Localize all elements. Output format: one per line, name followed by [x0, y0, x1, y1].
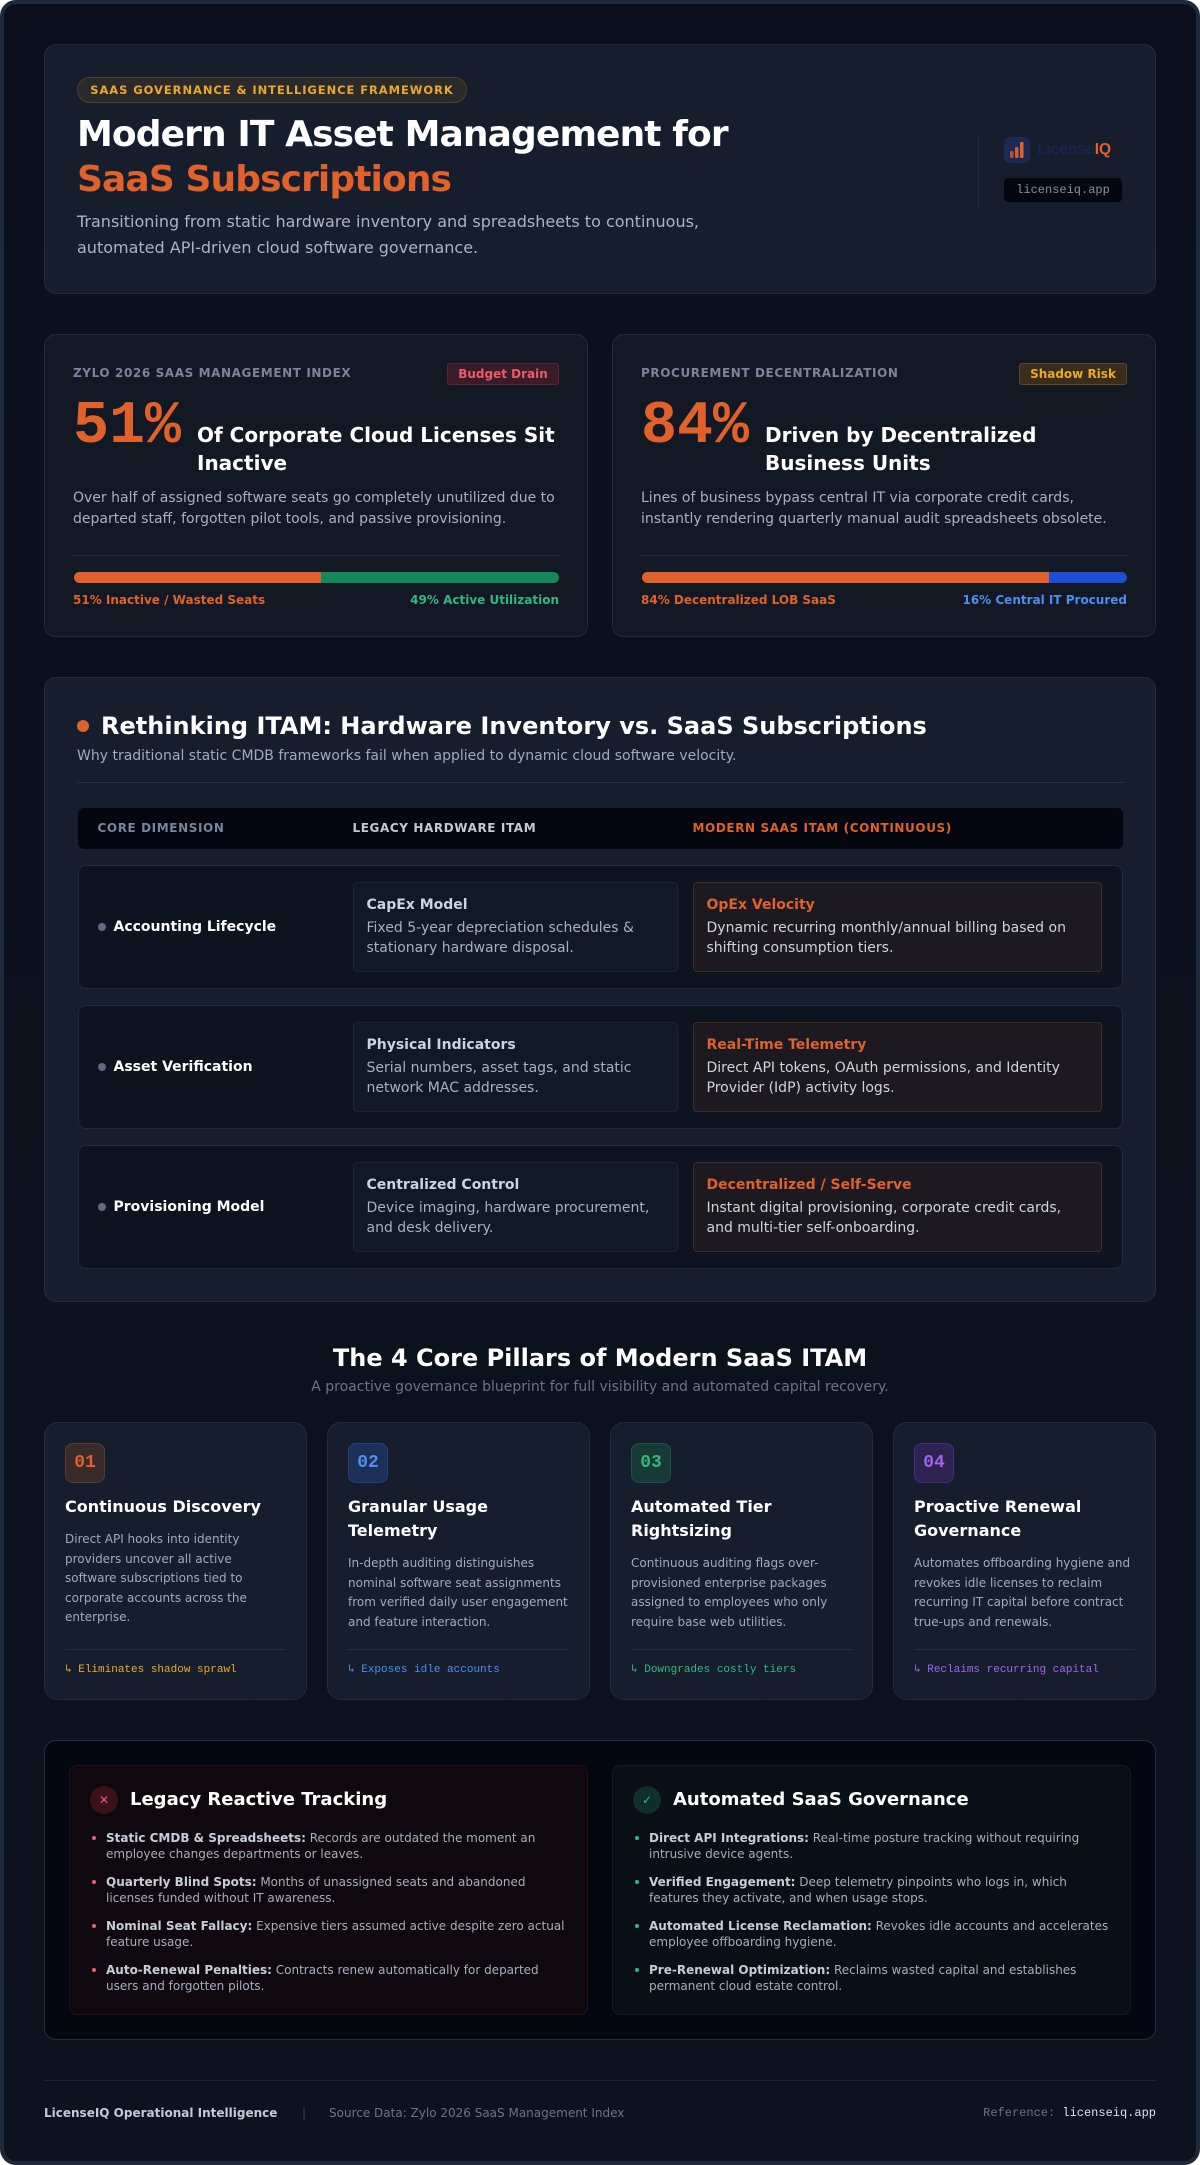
modern cell — [692, 882, 1102, 972]
pillar description: revokes idle licenses to reclaim — [914, 1576, 1102, 1590]
icon: cross: ✕ — [99, 1793, 109, 1807]
column: modern: MODERN SAAS ITAM (CONTINUOUS) — [692, 821, 952, 835]
tag: shadow risk — [1019, 363, 1127, 385]
big number: 51% — [73, 393, 181, 461]
modern cell — [692, 1162, 1102, 1252]
stat description: instantly rendering quarterly manual audit spreadsheets obsolete. — [641, 511, 1107, 527]
column: legacy: LEGACY HARDWARE ITAM — [352, 821, 536, 835]
pillar description — [631, 1556, 827, 1629]
list item — [649, 1919, 1108, 1949]
pillar title — [348, 1497, 488, 1540]
modern cell: shifting consumption tiers. — [706, 940, 893, 956]
divider — [73, 555, 560, 556]
legacy cell: CapEx Model — [366, 897, 468, 913]
table row: asset verification — [78, 1005, 1122, 1129]
stat headline — [765, 422, 1036, 474]
legacy cell: stationary hardware disposal. — [366, 940, 574, 956]
tag: shadow risk: Shadow Risk — [1030, 367, 1116, 381]
pillar card 03 — [610, 1422, 873, 1700]
pillar outcome: ↳ Downgrades costly tiers — [631, 1664, 796, 1676]
bullet — [635, 1968, 639, 1972]
list item — [649, 1963, 1076, 1993]
list item: permanent cloud estate control. — [649, 1979, 842, 1993]
bullet — [92, 1968, 96, 1972]
legacy cell: network MAC addresses. — [366, 1080, 539, 1096]
badge 01 — [65, 1443, 105, 1483]
pillar description: recurring IT capital before contract — [914, 1595, 1123, 1609]
pillar title: Granular Usage — [348, 1497, 488, 1516]
stat description — [73, 490, 555, 527]
subtitle: Transitioning from static hardware inventory and spreadsheets to continuous, — [77, 212, 699, 231]
list item: intrusive device agents. — [649, 1847, 793, 1861]
pillar description: software subscriptions tied to — [65, 1571, 243, 1585]
row label: Asset Verification — [114, 1059, 253, 1075]
footer source: Source Data: Zylo 2026 SaaS Management Index — [329, 2106, 624, 2120]
url chip: licenseiq.app — [1016, 183, 1110, 197]
modern cell: Direct API tokens, OAuth permissions, and Identity — [706, 1060, 1060, 1076]
bar label: active: 49% Active Utilization — [410, 593, 559, 607]
stat description: departed staff, forgotten pilot tools, and passive provisioning. — [73, 511, 506, 527]
tag: budget drain: Budget Drain — [458, 367, 548, 381]
bar label: decentralized: 84% Decentralized LOB SaaS — [641, 593, 836, 607]
pillar description: provisioned enterprise packages — [631, 1576, 827, 1590]
divider — [77, 782, 1124, 783]
eyebrow pill — [77, 77, 467, 103]
divider — [65, 1649, 286, 1650]
pillar card 01 — [44, 1422, 307, 1700]
list item: Pre-Renewal Optimization: Reclaims wasted capital and establishes — [649, 1963, 1076, 1977]
table row: provisioning model — [78, 1145, 1122, 1269]
badge 02: 02 — [357, 1453, 379, 1473]
pillar description: Automates offboarding hygiene and — [914, 1556, 1130, 1570]
section subtitle: Why traditional static CMDB frameworks fail when applied to dynamic cloud software velocity. — [77, 748, 736, 764]
bullet — [92, 1924, 96, 1928]
pillar description — [65, 1532, 247, 1624]
pillar description: corporate accounts across the — [65, 1591, 247, 1605]
list item: users and forgotten pilots. — [106, 1979, 264, 1993]
list item: Automated License Reclamation: Revokes idle accounts and accelerates — [649, 1919, 1108, 1933]
stat description — [641, 490, 1107, 527]
bullet — [635, 1880, 639, 1884]
table header — [78, 808, 1122, 849]
modern cell: and multi-tier self-onboarding. — [706, 1220, 920, 1236]
pillar card 04 — [893, 1422, 1156, 1700]
pillar outcome: ↳ Eliminates shadow sprawl — [65, 1664, 237, 1676]
pillar description: and feature interaction. — [348, 1615, 490, 1629]
list item — [106, 1831, 535, 1861]
icon: bar chart logo — [1004, 137, 1030, 163]
row label: Accounting Lifecycle — [114, 919, 276, 935]
list item: Nominal Seat Fallacy: Expensive tiers assumed active despite zero actual — [106, 1919, 565, 1933]
badge 01: 01 — [74, 1453, 96, 1473]
panel: legacy vs automated — [44, 1740, 1156, 2040]
footer brand: LicenseIQ Operational Intelligence — [44, 2106, 277, 2120]
badge 04: 04 — [923, 1453, 945, 1473]
list item — [106, 1875, 525, 1905]
pillar card 02 — [327, 1422, 590, 1700]
stat description: Over half of assigned software seats go completely unutilized due to — [73, 490, 555, 506]
list item — [649, 1875, 1067, 1905]
badge 03: 03 — [640, 1453, 662, 1473]
row label: Provisioning Model — [114, 1199, 264, 1215]
list item: Quarterly Blind Spots: Months of unassigned seats and abandoned — [106, 1875, 525, 1889]
legacy cell: Centralized Control — [366, 1177, 519, 1193]
stat headline: Driven by Decentralized — [765, 422, 1036, 446]
title: Modern IT Asset Management for — [77, 114, 728, 154]
pillar title: Telemetry — [348, 1521, 437, 1540]
divider — [914, 1649, 1135, 1650]
list item: features they activate, and when usage stops. — [649, 1891, 928, 1905]
legacy cell — [352, 1022, 678, 1112]
modern cell: OpEx Velocity — [706, 897, 815, 913]
list item — [106, 1919, 565, 1949]
legacy cell: Physical Indicators — [366, 1037, 516, 1053]
subtitle — [76, 212, 699, 257]
section heading: Rethinking ITAM: Hardware Inventory vs. SaaS Subscriptions — [101, 712, 927, 740]
pillar description: enterprise. — [65, 1610, 130, 1624]
row bullet — [98, 923, 106, 931]
pillars subtitle: A proactive governance blueprint for full visibility and automated capital recovery. — [311, 1379, 889, 1395]
stat label: PROCUREMENT DECENTRALIZATION — [641, 366, 899, 380]
panel: stat card 84% — [612, 334, 1156, 637]
bullet — [635, 1924, 639, 1928]
panel: stat card 51% — [44, 334, 588, 637]
pillar title: Continuous Discovery — [65, 1497, 261, 1516]
pillar outcome: ↳ Reclaims recurring capital — [914, 1664, 1099, 1676]
pillar description: Continuous auditing flags over- — [631, 1556, 818, 1570]
stat headline: Business Units — [765, 450, 931, 474]
stat label: ZYLO 2026 SAAS MANAGEMENT INDEX — [73, 366, 351, 380]
pillar title: Governance — [914, 1521, 1021, 1540]
list item: Auto-Renewal Penalties: Contracts renew automatically for departed — [106, 1963, 539, 1977]
eyebrow pill: SAAS GOVERNANCE & INTELLIGENCE FRAMEWORK — [90, 83, 454, 97]
stat headline: Of Corporate Cloud Licenses Sit — [197, 422, 555, 446]
progress bar — [74, 572, 559, 583]
big number: 84% — [641, 393, 749, 461]
pillar title: Rightsizing — [631, 1521, 732, 1540]
legacy cell — [352, 1162, 678, 1252]
pillars heading: The 4 Core Pillars of Modern SaaS ITAM — [333, 1344, 867, 1372]
footer separator: | — [302, 2106, 306, 2120]
divider — [631, 1649, 852, 1650]
panel: header — [44, 44, 1156, 294]
pillar title: Proactive Renewal — [914, 1497, 1081, 1516]
logo divider — [978, 135, 979, 208]
badge 04 — [914, 1443, 954, 1483]
stat description: Lines of business bypass central IT via corporate credit cards, — [641, 490, 1074, 506]
divider — [641, 555, 1128, 556]
panel: automated saas governance — [612, 1765, 1131, 2015]
icon: check: ✓ — [642, 1793, 652, 1807]
pillar title — [914, 1497, 1081, 1540]
legacy cell — [352, 882, 678, 972]
modern cell: Decentralized / Self-Serve — [706, 1177, 912, 1193]
list item: licenses funded without IT awareness. — [106, 1891, 335, 1905]
list item — [106, 1963, 539, 1993]
panel heading: Automated SaaS Governance — [673, 1789, 969, 1810]
panel: legacy reactive tracking — [69, 1765, 588, 2015]
tag: budget drain — [447, 363, 559, 385]
list item: Static CMDB & Spreadsheets: Records are outdated the moment an — [106, 1831, 535, 1845]
legacy cell: Serial numbers, asset tags, and static — [366, 1060, 632, 1076]
bar label: inactive: 51% Inactive / Wasted Seats — [73, 593, 265, 607]
divider — [348, 1649, 569, 1650]
footer reference: Reference: licenseiq.app — [983, 2106, 1156, 2120]
table row: accounting lifecycle — [78, 865, 1122, 989]
pillar description: Direct API hooks into identity — [65, 1532, 239, 1546]
column: dimension: CORE DIMENSION — [98, 821, 224, 835]
pillar description: assigned to employees who only — [631, 1595, 827, 1609]
icon: cross — [90, 1786, 118, 1814]
modern cell: Real-Time Telemetry — [706, 1037, 866, 1053]
pillar title: Automated Tier — [631, 1497, 772, 1516]
bullet — [635, 1836, 639, 1840]
list item: feature usage. — [106, 1935, 193, 1949]
title — [77, 114, 729, 200]
pillar description: nominal software seat assignments — [348, 1576, 561, 1590]
pillar description: In-depth auditing distinguishes — [348, 1556, 534, 1570]
modern cell: Instant digital provisioning, corporate credit cards, — [706, 1200, 1061, 1216]
list item: Direct API Integrations: Real-time posture tracking without requiring — [649, 1831, 1079, 1845]
stat headline: Inactive — [197, 450, 287, 474]
list item — [649, 1831, 1079, 1861]
footer divider — [44, 2080, 1156, 2081]
subtitle: automated API-driven cloud software governance. — [77, 238, 478, 257]
pillar description — [348, 1556, 568, 1629]
url chip — [1004, 178, 1122, 202]
list item: Verified Engagement: Deep telemetry pinpoints who logs in, which — [649, 1875, 1067, 1889]
modern cell: Dynamic recurring monthly/annual billing based on — [706, 920, 1066, 936]
logo: LicenseIQ — [1004, 137, 1111, 163]
badge 03 — [631, 1443, 671, 1483]
panel: comparison — [44, 677, 1156, 1302]
pillar description — [914, 1556, 1130, 1629]
stat headline — [197, 422, 555, 474]
list item: employee changes departments or leaves. — [106, 1847, 363, 1861]
pillar description: from verified daily user engagement — [348, 1595, 568, 1609]
badge 02 — [348, 1443, 388, 1483]
progress bar — [642, 572, 1127, 583]
modern cell — [692, 1022, 1102, 1112]
pillar description: providers uncover all active — [65, 1552, 232, 1566]
legacy cell: Fixed 5-year depreciation schedules & — [366, 920, 634, 936]
pillar description: require base web utilities. — [631, 1615, 786, 1629]
legacy cell: Device imaging, hardware procurement, — [366, 1200, 649, 1216]
pillar description: true-ups and renewals. — [914, 1615, 1052, 1629]
list item: employee offboarding hygiene. — [649, 1935, 837, 1949]
logo wordmark: LicenseIQ — [1037, 141, 1111, 158]
pillar title — [631, 1497, 772, 1540]
pillar outcome: ↳ Exposes idle accounts — [348, 1664, 500, 1676]
icon: check — [633, 1786, 661, 1814]
modern cell: Provider (IdP) activity logs. — [706, 1080, 895, 1096]
bullet — [92, 1880, 96, 1884]
bar label: central: 16% Central IT Procured — [962, 593, 1127, 607]
title: SaaS Subscriptions — [77, 158, 451, 200]
heading dot — [77, 720, 89, 732]
bullet — [92, 1836, 96, 1840]
panel heading: Legacy Reactive Tracking — [130, 1789, 387, 1810]
row bullet — [98, 1203, 106, 1211]
row bullet — [98, 1063, 106, 1071]
legacy cell: and desk delivery. — [366, 1220, 493, 1236]
